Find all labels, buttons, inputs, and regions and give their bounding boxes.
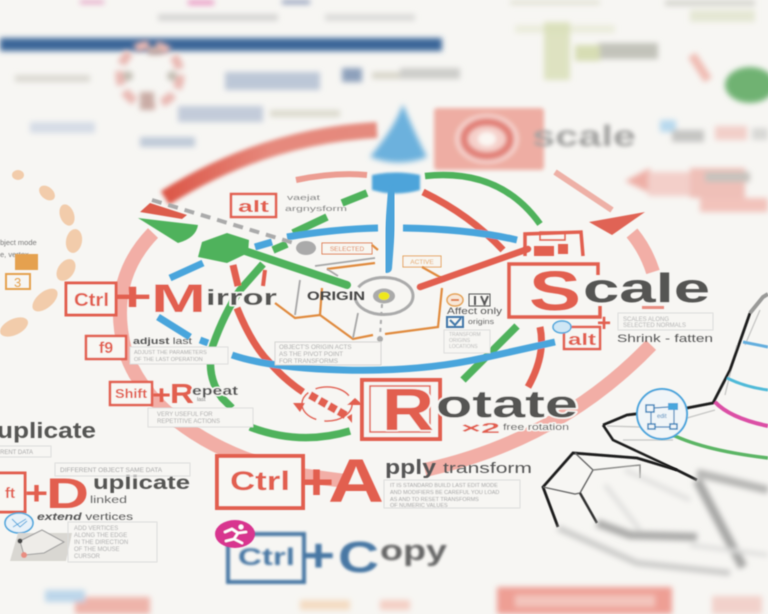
alt key top: argnysform [285, 206, 347, 213]
ctrl C copy [228, 529, 447, 582]
mirror icons [138, 200, 347, 285]
free rotation text: free rotation [503, 422, 569, 433]
affect only panel [444, 294, 502, 353]
A letter: A [328, 447, 384, 515]
green band [667, 432, 768, 458]
blurred bottom strip [45, 587, 762, 614]
rotate arrows icon [293, 387, 363, 423]
shift D duplicate linked [0, 463, 190, 518]
f9 key [86, 336, 126, 359]
gray top edge [750, 294, 768, 313]
blurred top header area [0, 0, 768, 147]
green arrow head [138, 218, 198, 243]
green arm [245, 251, 347, 285]
extend vertices: CURSOR [74, 554, 101, 560]
top red thick arc [165, 130, 377, 198]
note [148, 408, 253, 427]
tools icon [469, 294, 490, 306]
ctrl key [228, 534, 304, 582]
orange tag [15, 254, 38, 270]
rotate letter: R [382, 377, 434, 443]
number 3 key [6, 274, 30, 290]
ctrl A apply transform: AND MODIFIERS BE CAREFUL YOU LOAD [390, 490, 499, 496]
gray connector lines [295, 258, 375, 338]
uplicate text: uplicate [93, 473, 190, 494]
ctrl mirror shortcut [66, 275, 278, 321]
f9 adjust last: f9 [99, 340, 113, 357]
rotate box [362, 380, 440, 439]
scale shortcut [509, 259, 710, 322]
plus sign: + [152, 380, 171, 410]
orange connector lines [275, 245, 445, 339]
rotate shortcut [362, 377, 578, 443]
plus sign: + [302, 529, 335, 581]
ctrl A apply transform: IT IS STANDARD BUILD LAST EDIT MODE [390, 483, 498, 489]
origin marker [355, 278, 413, 342]
shrink fatten text: Shrink - fatten [617, 333, 713, 345]
save style icon [525, 232, 583, 256]
origin note [275, 342, 381, 365]
affect only panel: TRANSFORM [449, 332, 481, 338]
shift D duplicate linked: DIFFERENT OBJECT SAME DATA [60, 467, 163, 474]
selected label: SELECTED [330, 246, 364, 253]
shift D duplicate linked: ft [5, 485, 15, 502]
note [130, 347, 228, 364]
pink runner badge [215, 520, 255, 548]
shift repeat: REPETITIVE ACTIONS [157, 419, 220, 425]
green cube [198, 233, 249, 263]
selected marker [296, 241, 316, 255]
magenta band [715, 402, 768, 426]
origin note: AS THE PIVOT POINT [279, 351, 343, 358]
cale blurred text: scale [532, 120, 636, 153]
duplicate left [0, 418, 96, 457]
lower mesh crisp part [543, 453, 697, 527]
ctrl A apply transform [217, 447, 532, 515]
epeat text: epeat [192, 383, 239, 398]
f9 adjust last: ADJUST THE PARAMETERS [134, 350, 207, 356]
affect only panel: origins [468, 317, 494, 326]
ctrl A apply transform: AS AND TO RESET TRANSFORMS [390, 497, 479, 503]
note [384, 480, 520, 508]
f9 adjust last: OF THE LAST OPERATION [134, 357, 203, 363]
ctrl key [66, 283, 116, 315]
selected label [322, 243, 372, 254]
origins checkbox [447, 317, 463, 327]
C letter: C [338, 533, 379, 582]
alt key top: vaejat [287, 195, 320, 202]
left side blurred dots and orange tag [0, 170, 84, 341]
alt key [564, 327, 600, 349]
red ellipse arcs [233, 172, 612, 392]
extend vertices: ALONG THE EDGE [74, 533, 127, 539]
pply text: pply [385, 457, 437, 479]
plus sign: + [113, 275, 152, 319]
shift key [0, 473, 25, 512]
affect only panel: LOCATIONS [449, 344, 478, 350]
red line to scale [420, 249, 528, 287]
alt plus shrink fatten [553, 310, 713, 349]
number 3 key: 3 [14, 275, 21, 290]
ctrl A apply transform: OF NUMERIC VALUES [390, 503, 448, 509]
shift repeat: last [197, 397, 206, 403]
note [0, 446, 51, 457]
ctrl A apply transform: Ctrl [230, 466, 290, 496]
M letter: M [151, 277, 206, 321]
linked text: linked [90, 495, 127, 506]
irror text: irror [206, 285, 278, 310]
extend vertices [5, 511, 157, 562]
left side blurred dots and orange tag: e, vertex [0, 250, 29, 259]
blurred blue cone [370, 104, 427, 162]
f9 adjust last [86, 336, 228, 364]
extend vertices: ADD VERTICES [74, 526, 118, 532]
blue stem [387, 190, 393, 268]
transform text: transform [443, 461, 532, 477]
alt plus shrink fatten: alt [568, 331, 597, 349]
origin label: ORIGIN [307, 291, 365, 303]
orange icon [447, 294, 463, 306]
accent dash [642, 306, 664, 309]
affect only text: Affect only [447, 306, 502, 317]
edit mode circle icon [637, 389, 687, 439]
gray inner lines [607, 310, 760, 440]
plus sign: + [597, 310, 611, 337]
red arrow right [589, 212, 645, 235]
cale text: cale [583, 265, 710, 311]
ctrl key [217, 456, 303, 508]
D letter: D [46, 470, 89, 518]
alt key top: alt [238, 197, 270, 216]
ctrl C copy: Ctrl [238, 544, 295, 571]
lower blurred mesh [558, 470, 768, 573]
object mode note: bject mode [0, 238, 37, 247]
extend vertices: IN THE DIRECTION [74, 540, 128, 546]
extend vertices: OF THE MOUSE [74, 547, 120, 553]
shift key [110, 382, 152, 405]
note [68, 522, 157, 562]
R letter: R [170, 378, 194, 409]
gray note [444, 330, 490, 353]
opy text: opy [380, 535, 447, 567]
outer pink ring [120, 233, 653, 481]
shift repeat: Shift [115, 387, 148, 401]
blue ellipse arcs [158, 228, 555, 370]
otate text: otate [436, 384, 578, 426]
edit mode icon [553, 321, 571, 333]
blurred scale panel at top [434, 108, 636, 170]
shift repeat [110, 378, 253, 427]
tree icon [370, 104, 427, 268]
plus sign: + [25, 475, 48, 511]
red icon box [434, 108, 544, 170]
red arrow tail [140, 203, 187, 219]
active label [403, 256, 441, 267]
origin note: OBJECT'S ORIGIN ACTS [279, 344, 352, 351]
ctrl mirror shortcut: Ctrl [74, 289, 109, 310]
alt plus shrink fatten: SCALES ALONG [623, 317, 669, 323]
heading: extend vertices [37, 511, 133, 523]
edit mode icon [5, 513, 33, 533]
cap of cone [372, 172, 420, 194]
alt plus shrink fatten: SELECTED NORMALS [623, 323, 686, 329]
edit mode circle icon: edit [657, 414, 667, 420]
origin note: FOR TRANSFORMS [279, 358, 338, 365]
dashed axis [152, 200, 297, 244]
cyan bands [727, 378, 768, 390]
green ellipse arcs [210, 175, 540, 438]
right 3D mesh with edges [603, 294, 768, 470]
upper mesh black outline [603, 313, 750, 425]
alt key top [231, 194, 347, 217]
times two: ×2 [461, 420, 500, 437]
duplicate left: RENT DATA [0, 450, 33, 456]
blurred wreath icon [120, 45, 180, 110]
active label: ACTIVE [410, 259, 434, 266]
shift repeat: VERY USEFUL FOR [157, 412, 213, 418]
scale box [509, 264, 600, 317]
plus sign: + [299, 454, 334, 510]
affect only panel: ORIGINS [449, 338, 471, 344]
blurred right side labels [625, 120, 768, 212]
thumbnail [10, 533, 72, 561]
note [55, 463, 190, 476]
transform diagram rings [120, 172, 653, 481]
adjust last text: adjust last [133, 336, 192, 347]
orange dot trail [0, 170, 84, 341]
scale note [618, 313, 713, 330]
scale letter: S [529, 259, 581, 322]
